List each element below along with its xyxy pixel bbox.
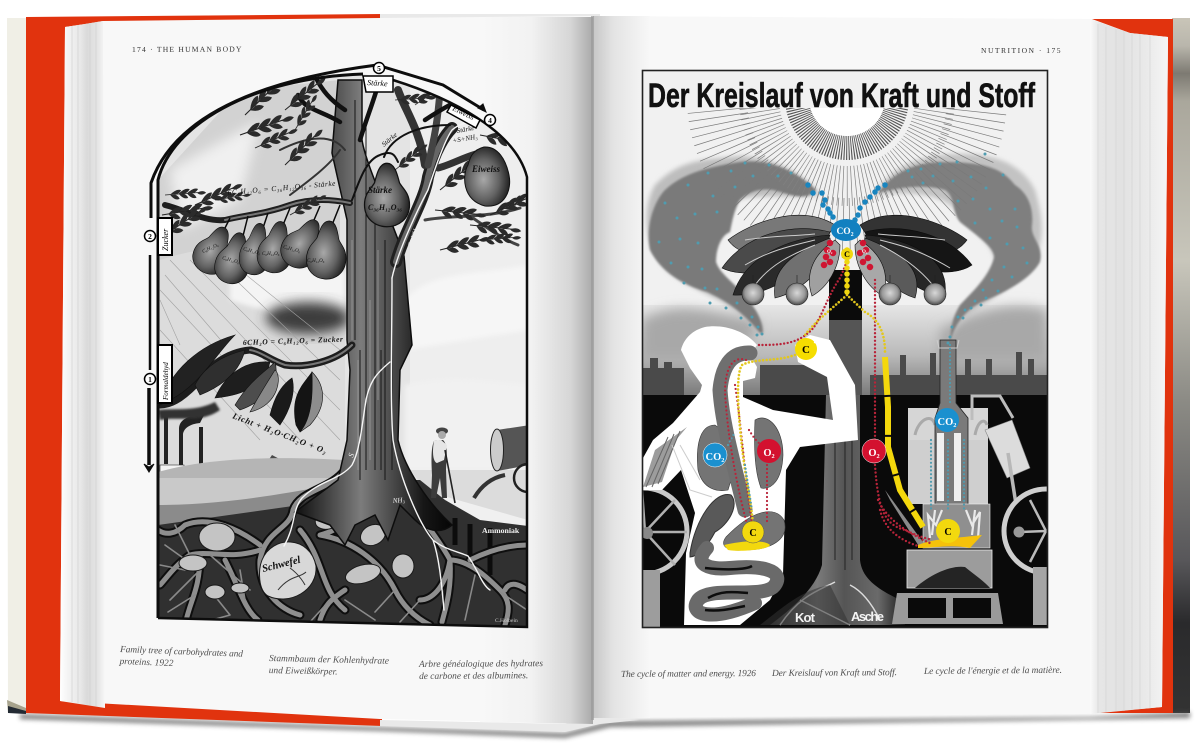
tree labels: Stärke xyxy=(380,131,399,149)
liver xyxy=(690,494,734,557)
caption left French: de carbone et des albumines. xyxy=(419,671,528,682)
CO2 top node xyxy=(831,219,861,241)
tree trunk xyxy=(829,270,862,320)
tree labels xyxy=(202,124,520,624)
tree labels: C.Holbein xyxy=(495,618,518,624)
O2 node lungs xyxy=(757,439,781,463)
tree labels: Stärke xyxy=(368,185,392,195)
big pear Eiweiss xyxy=(465,147,510,206)
branches xyxy=(160,78,520,405)
wheel left xyxy=(643,490,690,627)
title: Der Kreislauf von Kraft und Stoff xyxy=(648,77,1035,115)
label Formaldehyd: Formaldehyd xyxy=(162,362,170,401)
O2 node lungs: O₂ xyxy=(763,448,775,459)
caption left German: Stammbaum der Kohlenhydrate xyxy=(269,654,389,667)
red book cover xyxy=(26,14,382,726)
flow marker 4 xyxy=(484,114,496,126)
O2 red clusters: O₂ xyxy=(862,250,868,255)
tree labels: C₆H₁₂O₆ xyxy=(221,256,240,266)
foliage xyxy=(722,215,972,298)
roots xyxy=(158,470,528,625)
caption right German: Der Kreislauf von Kraft und Stoff. xyxy=(771,667,897,679)
food in stomach xyxy=(724,541,770,551)
caption left French: Arbre généalogique des hydrates xyxy=(418,659,543,670)
caption left German xyxy=(269,654,389,679)
factory silhouettes xyxy=(642,352,1047,395)
tree labels: Ammoniak xyxy=(482,526,520,535)
illustration: family tree xyxy=(144,60,542,630)
running head right: NUTRITION · 175 xyxy=(981,46,1062,55)
CO2 node lungs xyxy=(703,443,727,467)
intestine xyxy=(696,548,777,615)
label Starke: Stärke xyxy=(367,78,388,88)
tree labels: C₆H₁₂O₆ xyxy=(242,247,261,257)
tree labels: S xyxy=(346,452,356,459)
apple C in hand xyxy=(795,338,822,360)
trunk xyxy=(295,80,452,545)
book spine edge xyxy=(7,18,26,712)
smoke left xyxy=(649,161,816,333)
smoke right xyxy=(878,162,1041,347)
caption right French: Le cycle de l'énergie et de la matière. xyxy=(923,666,1062,677)
tree labels: Stärke xyxy=(456,124,475,135)
label Starke xyxy=(363,76,393,92)
CO2 node furnace xyxy=(935,408,959,432)
fuel chute yellow xyxy=(885,357,923,527)
O2 red clusters: O₂ xyxy=(827,250,833,255)
tree labels: 6CH₂O = C₆H₁₂O₆ = Zucker xyxy=(243,335,343,347)
flow marker 1 xyxy=(144,374,156,384)
arch frame with channel xyxy=(144,65,527,627)
wheel right xyxy=(1002,486,1047,625)
caption left English xyxy=(118,644,243,672)
page stack right xyxy=(1090,19,1168,714)
clouds right xyxy=(410,88,526,382)
smoke and factory xyxy=(164,412,168,464)
furnace xyxy=(885,340,1003,624)
label Eiweiss xyxy=(447,103,480,128)
flow marker 4: 4 xyxy=(488,116,492,125)
tree labels: C₃₆H₁₂O₃₆ xyxy=(368,203,402,212)
smoke particles xyxy=(659,154,1027,343)
tree labels: S+NH₃ xyxy=(406,225,421,248)
tree labels: Schwefel xyxy=(261,555,302,575)
CO2 top node: CO₂ xyxy=(836,227,854,237)
right page xyxy=(591,16,1168,720)
C node fire: C xyxy=(944,527,952,538)
page stack left xyxy=(60,21,105,708)
flow marker 5: 5 xyxy=(377,64,381,73)
human body silhouette xyxy=(643,326,858,625)
CO2 node lungs: CO₂ xyxy=(706,452,724,463)
barrel and cart xyxy=(472,426,526,499)
apple C in hand: C xyxy=(802,344,810,356)
CO2 node furnace: CO₂ xyxy=(938,417,956,428)
label Kol: Kot xyxy=(795,610,816,625)
field right xyxy=(410,470,526,474)
tree labels: 6C₆H₁₂O₆ = C₃₆H₁₂O₃₆ - Stärke xyxy=(227,179,336,197)
distant horizon band xyxy=(642,305,1047,397)
label Zucker: Zucker xyxy=(161,228,170,251)
tree labels: +S+NH₃ xyxy=(452,133,479,145)
dotted flows xyxy=(725,250,964,546)
left page xyxy=(60,16,593,724)
flow marker 2: 2 xyxy=(148,232,152,241)
label Asche: Asche xyxy=(851,609,884,624)
farmer xyxy=(431,428,455,503)
tree labels: Eiweiss xyxy=(471,164,501,174)
O2 node free xyxy=(862,439,886,463)
label Formaldehyd xyxy=(158,345,172,403)
organs xyxy=(697,418,785,550)
pears on branch xyxy=(187,205,349,288)
caption left German: und Eiweißkörper. xyxy=(269,665,338,678)
caption left French xyxy=(418,659,543,682)
fire fuel xyxy=(918,535,982,548)
tree labels: C₆H₁₂O₆ xyxy=(202,243,220,255)
tree labels: C₆H₁₂O₆ xyxy=(307,259,325,264)
caption left English: Family tree of carbohydrates and xyxy=(119,644,243,660)
black ground xyxy=(642,395,1047,627)
blue chain xyxy=(808,185,885,220)
large leaves xyxy=(160,335,323,432)
caption left English: proteins. 1922 xyxy=(118,657,174,669)
tree labels: NH₃ xyxy=(391,496,406,505)
tree labels: Licht + H₂O·CH₂O + O₂ xyxy=(230,410,328,456)
rocks xyxy=(178,520,414,600)
background photo strip behind book xyxy=(1172,18,1190,713)
flow marker 2 xyxy=(144,230,156,242)
C top node xyxy=(841,248,853,260)
C node fire xyxy=(936,519,960,543)
big pear Starke xyxy=(364,163,410,227)
leaf sprigs xyxy=(160,74,539,256)
arm muscle xyxy=(643,427,687,487)
label Eiweiss: Eiweiss xyxy=(450,103,476,122)
piston and pipe xyxy=(970,394,1030,500)
apples xyxy=(742,275,946,305)
flow marker 5 xyxy=(374,62,384,74)
O2 node free: O₂ xyxy=(868,448,880,459)
book shadow xyxy=(20,712,1190,738)
label Zucker xyxy=(158,218,172,255)
sun with rays xyxy=(688,108,1006,258)
C top node: C xyxy=(844,250,850,259)
tree labels: C₆H₁₂O₆ xyxy=(262,252,280,257)
illustration: cycle of matter and energy xyxy=(642,70,1048,628)
C node stomach: C xyxy=(749,528,757,539)
O2 red clusters xyxy=(824,243,870,267)
smoke halos xyxy=(647,156,820,335)
sap lines xyxy=(284,123,490,610)
caption right English: The cycle of matter and energy. 1926 xyxy=(621,668,756,680)
soil xyxy=(150,480,528,630)
flow marker 1: 1 xyxy=(148,375,152,384)
C node stomach xyxy=(742,521,764,543)
tree labels: C₆H₁₂O₆ xyxy=(282,245,301,255)
running head left: 174 · THE HUMAN BODY xyxy=(132,45,243,54)
sky left xyxy=(160,80,340,288)
